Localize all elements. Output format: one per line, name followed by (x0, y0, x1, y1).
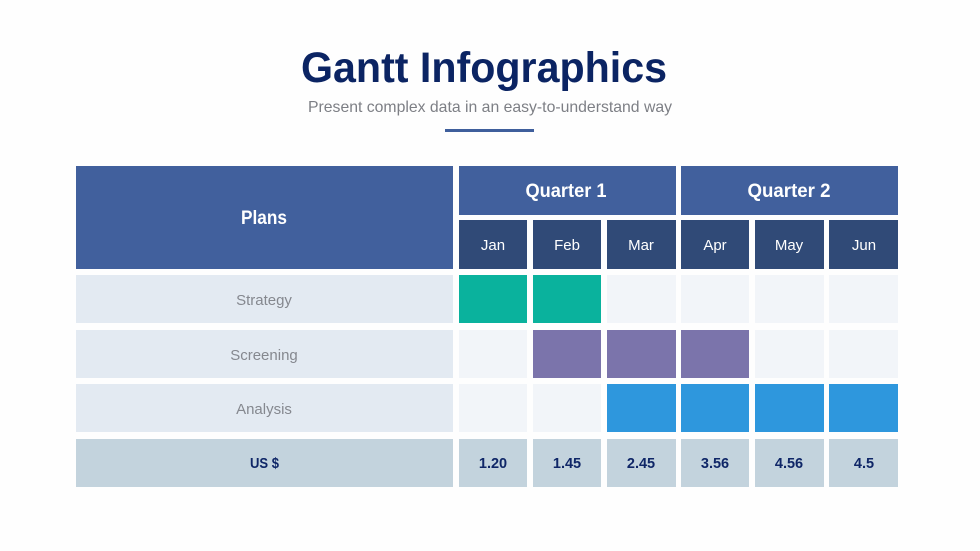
month: Jan: Jan (481, 237, 505, 254)
quarter 1 header: Quarter 1 (526, 181, 607, 202)
row: US $ values: 4.56 (775, 456, 803, 472)
row: US $ values: 1.20 (479, 456, 507, 472)
plans header (76, 166, 453, 269)
quarter 1 header (459, 166, 676, 215)
month: Jun: Jun (852, 237, 876, 254)
title: Gantt Infographics (301, 44, 667, 92)
plans header: Plans (241, 208, 287, 229)
row: Screening (76, 330, 898, 378)
row: Strategy (76, 275, 898, 323)
title underline (445, 129, 534, 132)
month: May (755, 220, 824, 269)
quarter 2 header (681, 166, 898, 215)
month: Apr: Apr (703, 237, 727, 254)
row: US $ values: 2.45 (627, 456, 655, 472)
month: May: May (775, 237, 804, 254)
row: US $ values: 4.5 (854, 456, 874, 472)
subtitle: Present complex data in an easy-to-understand way (308, 99, 672, 116)
quarter 2 header: Quarter 2 (748, 181, 830, 202)
row: US $ values: 3.56 (701, 456, 729, 472)
row: Screening: Screening (230, 347, 298, 364)
month: Jan (459, 220, 527, 269)
month: Mar (607, 220, 676, 269)
row: US $ values (76, 439, 898, 487)
month: Jun (829, 220, 898, 269)
month: Mar: Mar (628, 237, 654, 254)
row: Analysis: Analysis (236, 401, 292, 418)
month: Apr (681, 220, 749, 269)
month: Feb (533, 220, 601, 269)
row: US $ values: US $ (250, 456, 279, 472)
row: Strategy: Strategy (236, 292, 292, 309)
row: US $ values: 1.45 (553, 456, 581, 472)
month: Feb: Feb (554, 237, 580, 254)
row: Analysis (76, 384, 898, 432)
gantt table (76, 166, 898, 487)
